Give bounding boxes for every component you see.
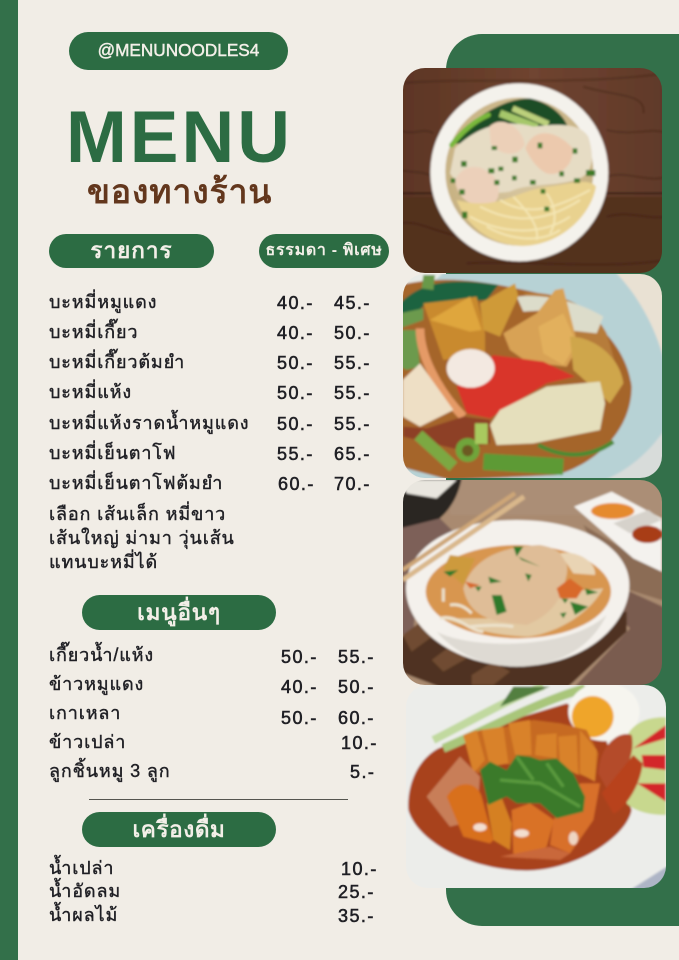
row [49, 289, 371, 314]
row [49, 318, 371, 343]
row [49, 440, 371, 464]
row: 50.- [277, 353, 314, 373]
row: บะหมี่หมูแดง [49, 292, 157, 312]
right green backing panel [446, 34, 679, 926]
heading: other menu [82, 595, 276, 630]
row: บะหมี่แห้ง [49, 382, 132, 402]
noodle choice note: เส้นใหญ่ ม่ามา วุ่นเส้น [49, 528, 235, 548]
heading: price types [259, 234, 389, 268]
row: ลูกชิ้นหมู 3 ลูก [49, 761, 170, 781]
row: น้ำอัดลม [49, 881, 121, 901]
row [49, 470, 371, 494]
row: 50.- [281, 708, 318, 728]
row [49, 703, 375, 728]
noodle choice note: แทนบะหมี่ได้ [49, 552, 158, 572]
heading: items: รายการ [90, 238, 173, 263]
row: 60.- [338, 708, 375, 728]
heading: items [49, 234, 214, 268]
row: 40.- [277, 323, 314, 343]
row: เกี๊ยวน้ำ/แห้ง [49, 645, 154, 665]
noodle menu list [49, 289, 371, 572]
row [49, 642, 375, 667]
row: บะหมี่เกี๊ยวต้มยำ [49, 352, 185, 372]
row: 10.- [341, 859, 378, 879]
row [49, 674, 375, 697]
title: MENU: MENU [66, 97, 293, 178]
row: เกาเหลา [49, 703, 121, 723]
heading: drinks [82, 812, 276, 847]
row: 50.- [338, 677, 375, 697]
drinks list [49, 854, 378, 926]
row [49, 878, 375, 902]
other menu list [49, 642, 378, 782]
row: บะหมี่เย็นตาโฟต้มยำ [49, 473, 223, 493]
row [49, 732, 378, 753]
row: 25.- [338, 882, 375, 902]
photo: yen ta fo noodle soup [400, 270, 667, 483]
row [49, 854, 378, 879]
row: 50.- [277, 414, 314, 434]
row: 55.- [338, 647, 375, 667]
row: ข้าวเปล่า [49, 732, 126, 752]
row: น้ำเปล่า [49, 858, 114, 878]
row: 50.- [281, 647, 318, 667]
photo: wonton noodle soup [400, 63, 667, 277]
heading: drinks: เครื่องดื่ม [132, 817, 225, 842]
row: 60.- [278, 474, 315, 494]
row: 50.- [277, 383, 314, 403]
row: 65.- [334, 444, 371, 464]
row: บะหมี่แห้งราดน้ำหมูแดง [49, 413, 249, 433]
photo: minced pork noodles in white bowl [400, 475, 667, 692]
row: บะหมี่เย็นตาโฟ [49, 443, 176, 463]
row: ข้าวหมูแดง [49, 674, 144, 694]
handle pill [69, 32, 288, 70]
heading: price types: ธรรมดา - พิเศษ [266, 242, 382, 259]
photo: red pork with rice [400, 680, 670, 893]
row: 55.- [334, 383, 371, 403]
row: 5.- [350, 762, 375, 782]
row [49, 902, 375, 926]
noodle choice note: เลือก เส้นเล็ก หมี่ขาว [49, 504, 226, 524]
row: 50.- [334, 323, 371, 343]
row: น้ำผลไม้ [49, 905, 118, 925]
row: 55.- [334, 414, 371, 434]
left green bar [0, 0, 18, 960]
subtitle: ของทางร้าน [87, 174, 272, 211]
handle pill: @MENUNOODLES4 [98, 40, 259, 60]
row [49, 348, 371, 373]
row: 40.- [277, 293, 314, 313]
row: 40.- [281, 677, 318, 697]
heading: other menu: เมนูอื่นๆ [137, 600, 221, 625]
row: 35.- [338, 906, 375, 926]
row [49, 410, 371, 434]
food photo column [403, 68, 666, 888]
noodle choice note [49, 501, 235, 572]
row [49, 758, 375, 782]
row [49, 379, 371, 403]
row: 45.- [334, 293, 371, 313]
row: 55.- [277, 444, 314, 464]
row: 55.- [334, 353, 371, 373]
row: 70.- [334, 474, 371, 494]
row: บะหมี่เกี๊ยว [49, 322, 138, 342]
row: 10.- [341, 733, 378, 753]
